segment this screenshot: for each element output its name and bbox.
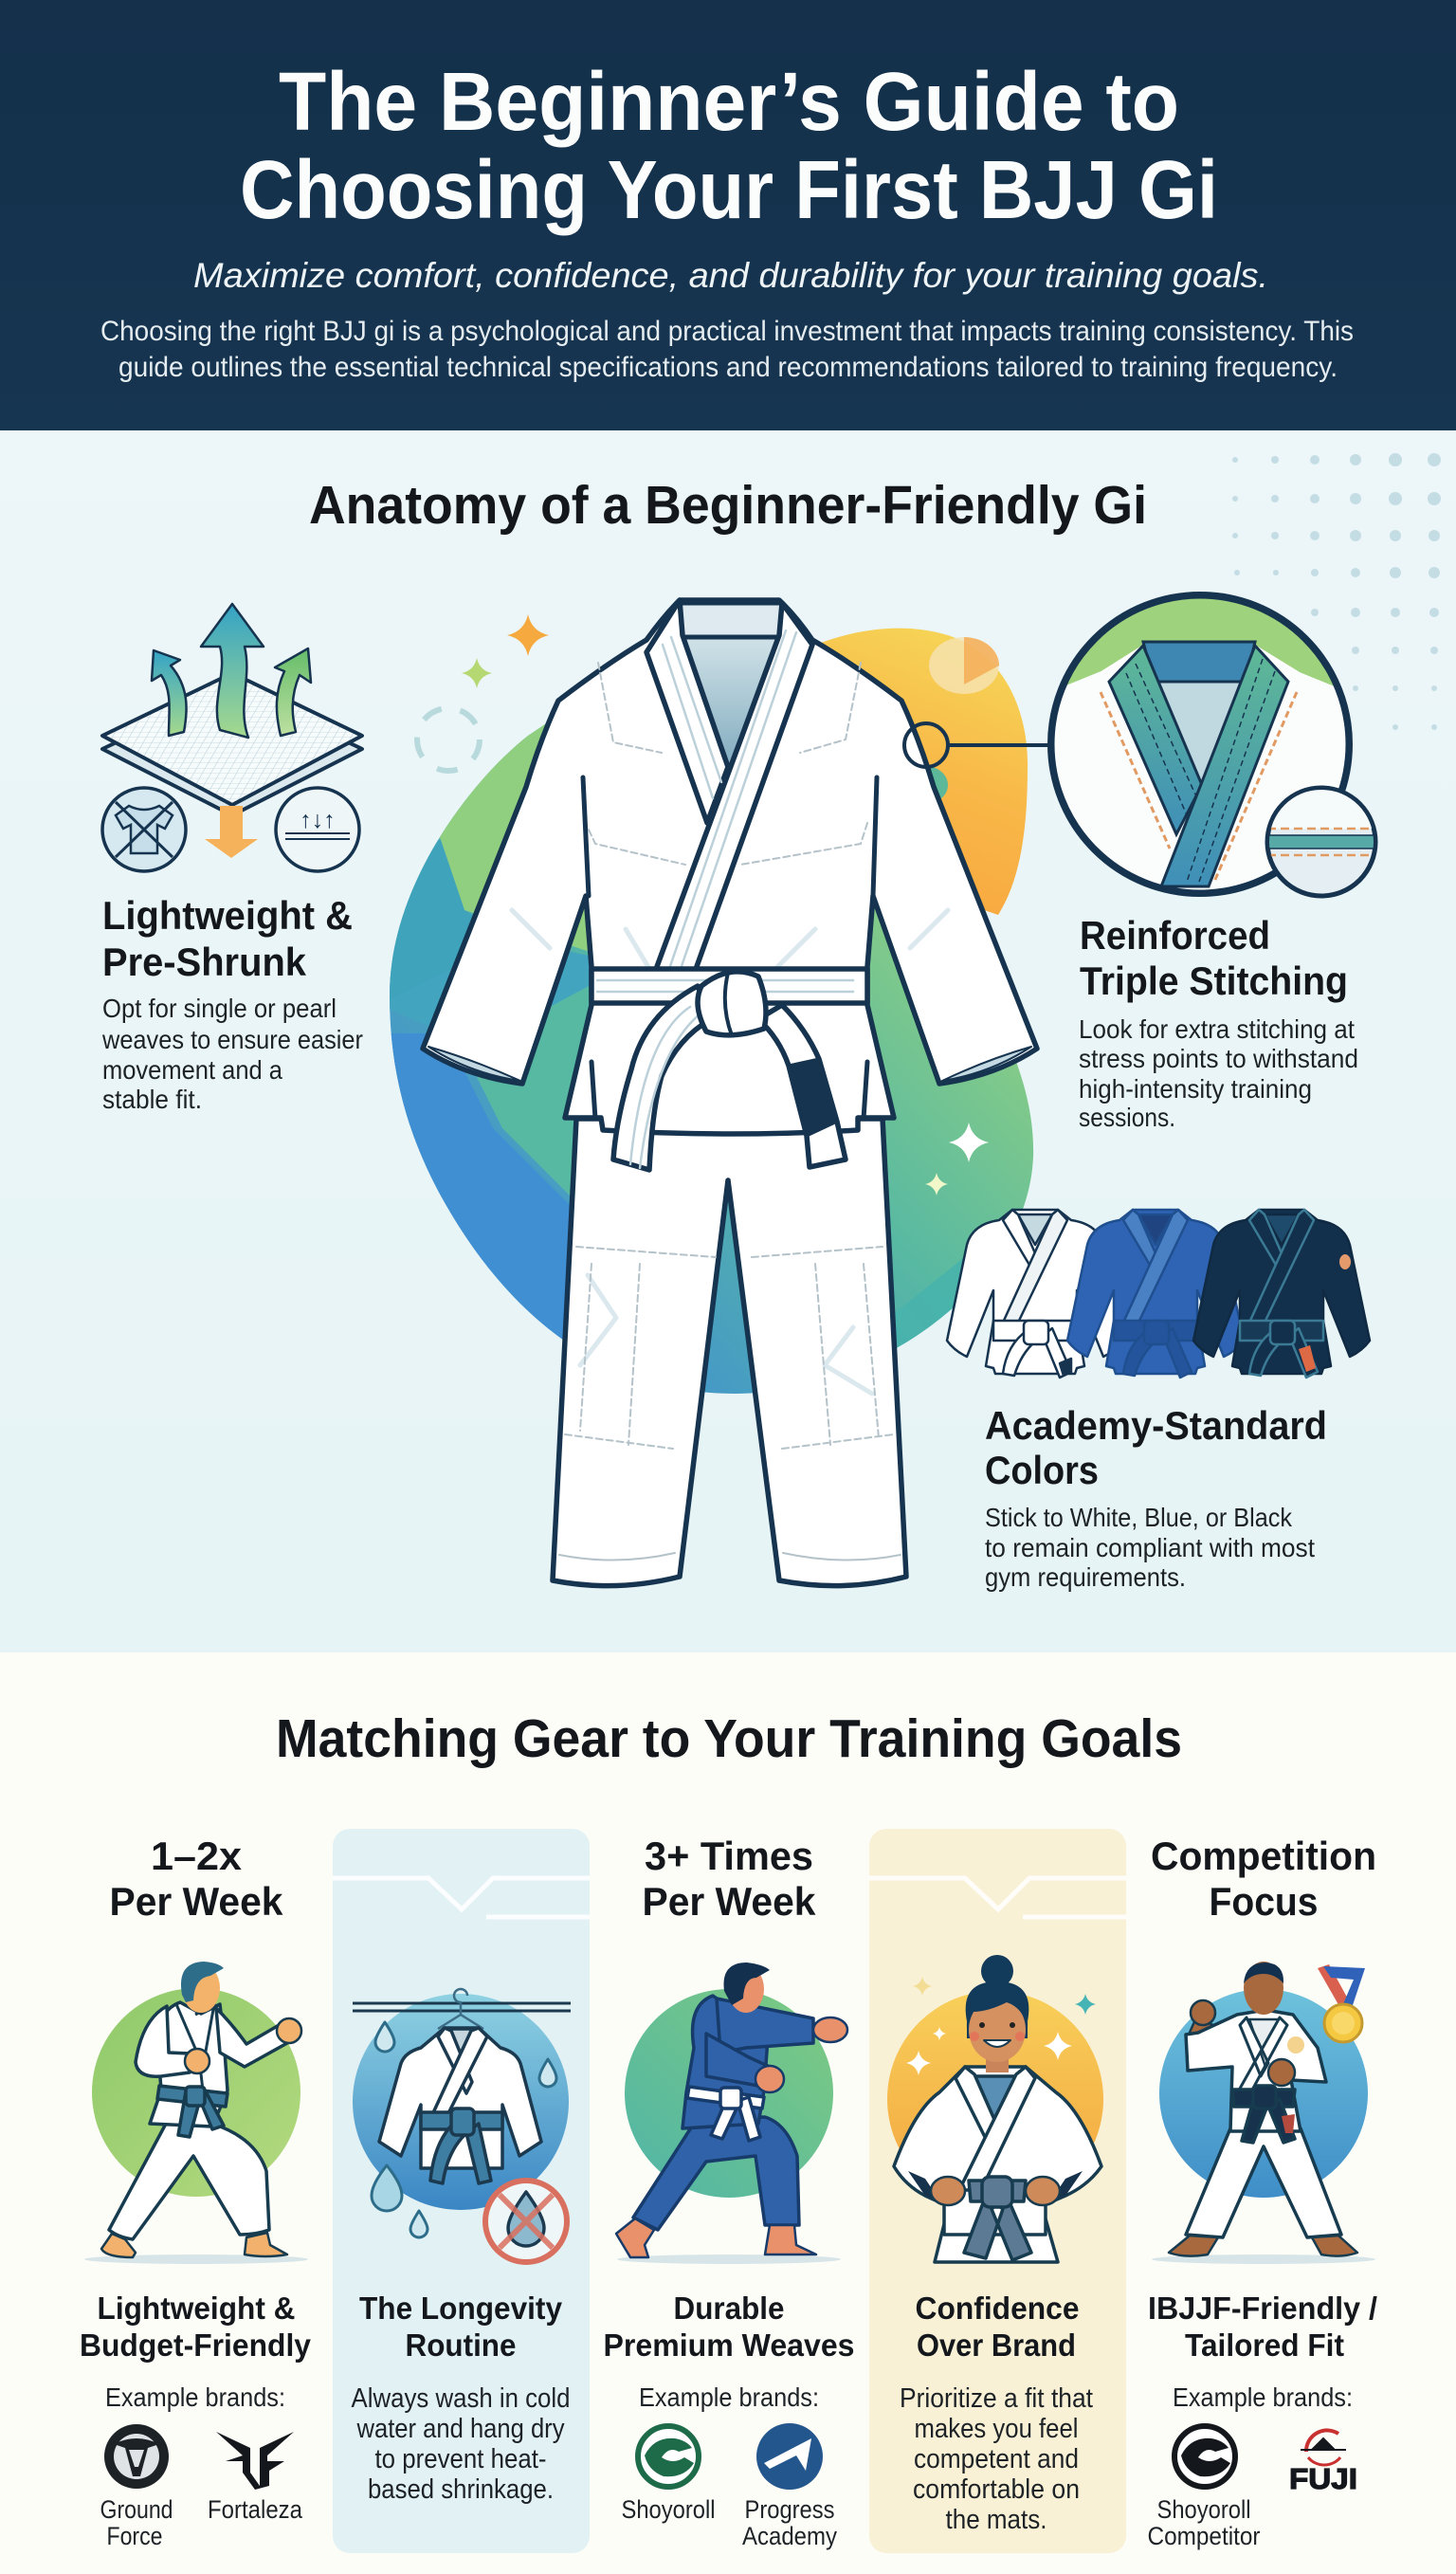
icon: moisture-wicking fabric — [102, 604, 362, 858]
confidence card body text: makes you feel — [914, 2414, 1079, 2444]
column 5 brands: Competitor — [1147, 2522, 1261, 2550]
logo: shoyoroll green — [638, 2426, 699, 2487]
column 1 brands — [100, 2382, 303, 2550]
icon: black mini gi — [1193, 1210, 1370, 1378]
panel: confidence card — [869, 1829, 1126, 2553]
column 3: 3+ times per week heading — [643, 1834, 816, 1924]
title: The Beginner’s Guide to — [279, 56, 1179, 148]
text: academy-standard colors: gym requirements. — [985, 1562, 1186, 1592]
column 3: 3+ times per week heading: Per Week — [643, 1879, 816, 1924]
logo: fortaleza — [216, 2432, 294, 2490]
pant cuff lines — [559, 1553, 901, 1561]
confidence card body text: Prioritize a fit that — [900, 2383, 1093, 2414]
column 5 brands: Shoyoroll — [1156, 2495, 1251, 2524]
intro paragraph — [100, 316, 1354, 383]
neck opening — [682, 630, 779, 773]
arrow: down orange — [205, 806, 258, 858]
column 1 brands: Example brands: — [105, 2382, 285, 2412]
panel: longevity card — [333, 1829, 590, 2553]
panel: training goals section background — [0, 1652, 1456, 2574]
main illustration: white gi — [423, 600, 1037, 1586]
icon: medal — [1318, 1964, 1365, 2042]
icon: white mini gi — [947, 1210, 1123, 1378]
intro paragraph: guide outlines the essential technical specifications and recommendations tailored to training frequency. — [118, 352, 1338, 383]
column 1 brands: Force — [106, 2522, 163, 2550]
text: lightweight and pre-shrunk — [101, 893, 363, 1114]
column 1 recommendation: Budget-Friendly — [80, 2328, 312, 2363]
arrow: centre up — [201, 604, 264, 738]
confidence card body text: comfortable on — [913, 2474, 1080, 2505]
logo: shoyoroll black — [1174, 2426, 1235, 2487]
arrow: right up — [275, 648, 311, 736]
text: lightweight and pre-shrunk: Pre-Shrunk — [102, 940, 307, 984]
title — [240, 56, 1218, 236]
text: lightweight and pre-shrunk: Opt for single or pearl — [102, 994, 337, 1023]
column 5 recommendation: IBJJF-Friendly / — [1148, 2291, 1377, 2326]
belt right tail — [758, 1005, 846, 1167]
panel: header background — [0, 0, 1456, 430]
text: reinforced triple stitching: sessions. — [1079, 1103, 1175, 1132]
confidence card title: Over Brand — [917, 2328, 1076, 2363]
lapel stripes — [663, 630, 796, 969]
belt black bar — [789, 1059, 837, 1136]
confidence card body text: the mats. — [946, 2505, 1046, 2535]
text: academy-standard colors: to remain compliant with most — [985, 1533, 1315, 1562]
text: academy-standard colors: Stick to White, Blue, or Black — [985, 1503, 1293, 1532]
text: reinforced triple stitching: stress points to withstand — [1079, 1044, 1358, 1073]
text: lightweight and pre-shrunk: Lightweight & — [102, 893, 353, 938]
text: reinforced triple stitching: Reinforced — [1080, 913, 1270, 958]
column 3 recommendation — [603, 2291, 855, 2363]
text: academy-standard colors: Academy-Standard — [985, 1403, 1327, 1448]
icon: stable-fit badge: ↑↓↑ — [300, 807, 336, 833]
longevity card body text: based shrinkage. — [368, 2474, 554, 2505]
text: academy-standard colors: Colors — [985, 1448, 1099, 1492]
icon: sparkles — [417, 614, 989, 1196]
text: lightweight and pre-shrunk: stable fit. — [102, 1085, 202, 1114]
text: reinforced triple stitching: Look for extra stitching at — [1079, 1014, 1355, 1044]
gi pants — [553, 1119, 906, 1586]
icon: no heat prohibition — [485, 2181, 567, 2262]
longevity card title: Routine — [406, 2328, 516, 2363]
column 5 brands: Example brands: — [1173, 2382, 1353, 2412]
figure: casual trainer in white gi — [84, 1962, 308, 2264]
right lapel — [655, 603, 812, 972]
longevity card body text — [351, 2383, 571, 2505]
longevity card body text: Always wash in cold — [351, 2383, 571, 2414]
back collar — [680, 603, 782, 637]
figure: smiling woman in white gi — [887, 1955, 1103, 2262]
icon: no-shrink shirt — [102, 788, 186, 871]
text: lightweight and pre-shrunk: weaves to ensure easier — [101, 1025, 363, 1054]
panel: anatomy section background — [0, 430, 1456, 1652]
belt left tail — [613, 986, 711, 1170]
logo: ground force — [104, 2424, 169, 2489]
column 3 brands: Progress — [745, 2495, 834, 2524]
stitching details — [565, 663, 894, 1449]
icon: blue mini gi — [1067, 1210, 1244, 1378]
column 5: competition focus heading: Focus — [1210, 1879, 1318, 1924]
arrow: left up — [152, 650, 187, 736]
column 1 recommendation: Lightweight & — [97, 2291, 296, 2326]
belt band — [592, 969, 867, 1003]
text: academy-standard colors — [985, 1403, 1327, 1592]
callout: small seam inset — [1267, 788, 1375, 896]
figure: competitor in white gi with medal — [1152, 1962, 1375, 2264]
subtitle: Maximize comfort, confidence, and durability for your training goals. — [193, 256, 1268, 295]
column 3 brands: Academy — [742, 2522, 837, 2550]
column 5 brands — [1147, 2382, 1357, 2550]
figure: frequent trainer in blue gi — [616, 1962, 847, 2264]
heading: anatomy: Anatomy of a Beginner-Friendly Gi — [309, 475, 1147, 536]
logo: progress academy — [756, 2423, 823, 2490]
column 1 brands: Fortaleza — [208, 2495, 303, 2524]
left lapel — [646, 600, 728, 823]
longevity card body text: water and hang dry — [356, 2414, 565, 2444]
sparkles around woman — [906, 1977, 1096, 2075]
belt knot — [698, 972, 766, 1035]
column 5: competition focus heading — [1151, 1834, 1376, 1924]
column 1: 1-2x per week heading: Per Week — [110, 1879, 283, 1924]
confidence card body text: competent and — [914, 2444, 1079, 2474]
confidence card title — [916, 2291, 1079, 2363]
callout: stitching pointer — [904, 723, 1051, 767]
column 3 recommendation: Premium Weaves — [603, 2328, 855, 2363]
column 3 brands: Shoyoroll — [622, 2495, 715, 2524]
text: reinforced triple stitching — [1079, 913, 1358, 1132]
icon: water drops — [372, 2022, 556, 2237]
title: Choosing Your First BJJ Gi — [240, 144, 1218, 236]
confidence card title: Confidence — [916, 2291, 1079, 2326]
intro paragraph: Choosing the right BJJ gi is a psychological and practical investment that impacts training consistency. This — [100, 316, 1354, 347]
column 3: 3+ times per week heading: 3+ Times — [645, 1834, 813, 1878]
figure: hanging gi drying routine — [353, 1989, 571, 2262]
confidence card body text — [900, 2383, 1093, 2535]
column 1: 1-2x per week heading — [110, 1834, 283, 1924]
longevity card title — [359, 2291, 563, 2363]
text: reinforced triple stitching: high-intensity training — [1079, 1074, 1312, 1104]
dot pattern — [1232, 453, 1441, 730]
text: lightweight and pre-shrunk: movement and a — [102, 1055, 282, 1085]
longevity card body text: to prevent heat- — [375, 2444, 546, 2474]
column 1 brands: Ground — [100, 2495, 173, 2524]
logo: fuji: FUJI — [1289, 2462, 1357, 2495]
sleeve cuffs and folds — [428, 777, 1031, 1119]
column 1 recommendation — [80, 2291, 312, 2363]
fabric wrinkles — [512, 910, 948, 1394]
callout: stitching close-up — [1043, 588, 1356, 901]
column 5: competition focus heading: Competition — [1151, 1834, 1376, 1878]
column 3 brands — [622, 2382, 837, 2550]
text: reinforced triple stitching: Triple Stitching — [1080, 958, 1348, 1003]
logo: fuji — [1289, 2430, 1357, 2495]
column 1: 1-2x per week heading: 1–2x — [151, 1834, 243, 1878]
longevity card title: The Longevity — [359, 2291, 563, 2326]
column 5 recommendation — [1148, 2291, 1377, 2363]
colorful backdrop behind gi — [379, 626, 1043, 1413]
icon: stable-fit badge — [276, 788, 359, 871]
column 5 recommendation: Tailored Fit — [1185, 2328, 1344, 2363]
column 3 brands: Example brands: — [639, 2382, 819, 2412]
column 3 recommendation: Durable — [673, 2291, 785, 2326]
gi jacket — [423, 600, 1037, 1134]
heading: training goals: Matching Gear to Your Training Goals — [276, 1708, 1182, 1769]
